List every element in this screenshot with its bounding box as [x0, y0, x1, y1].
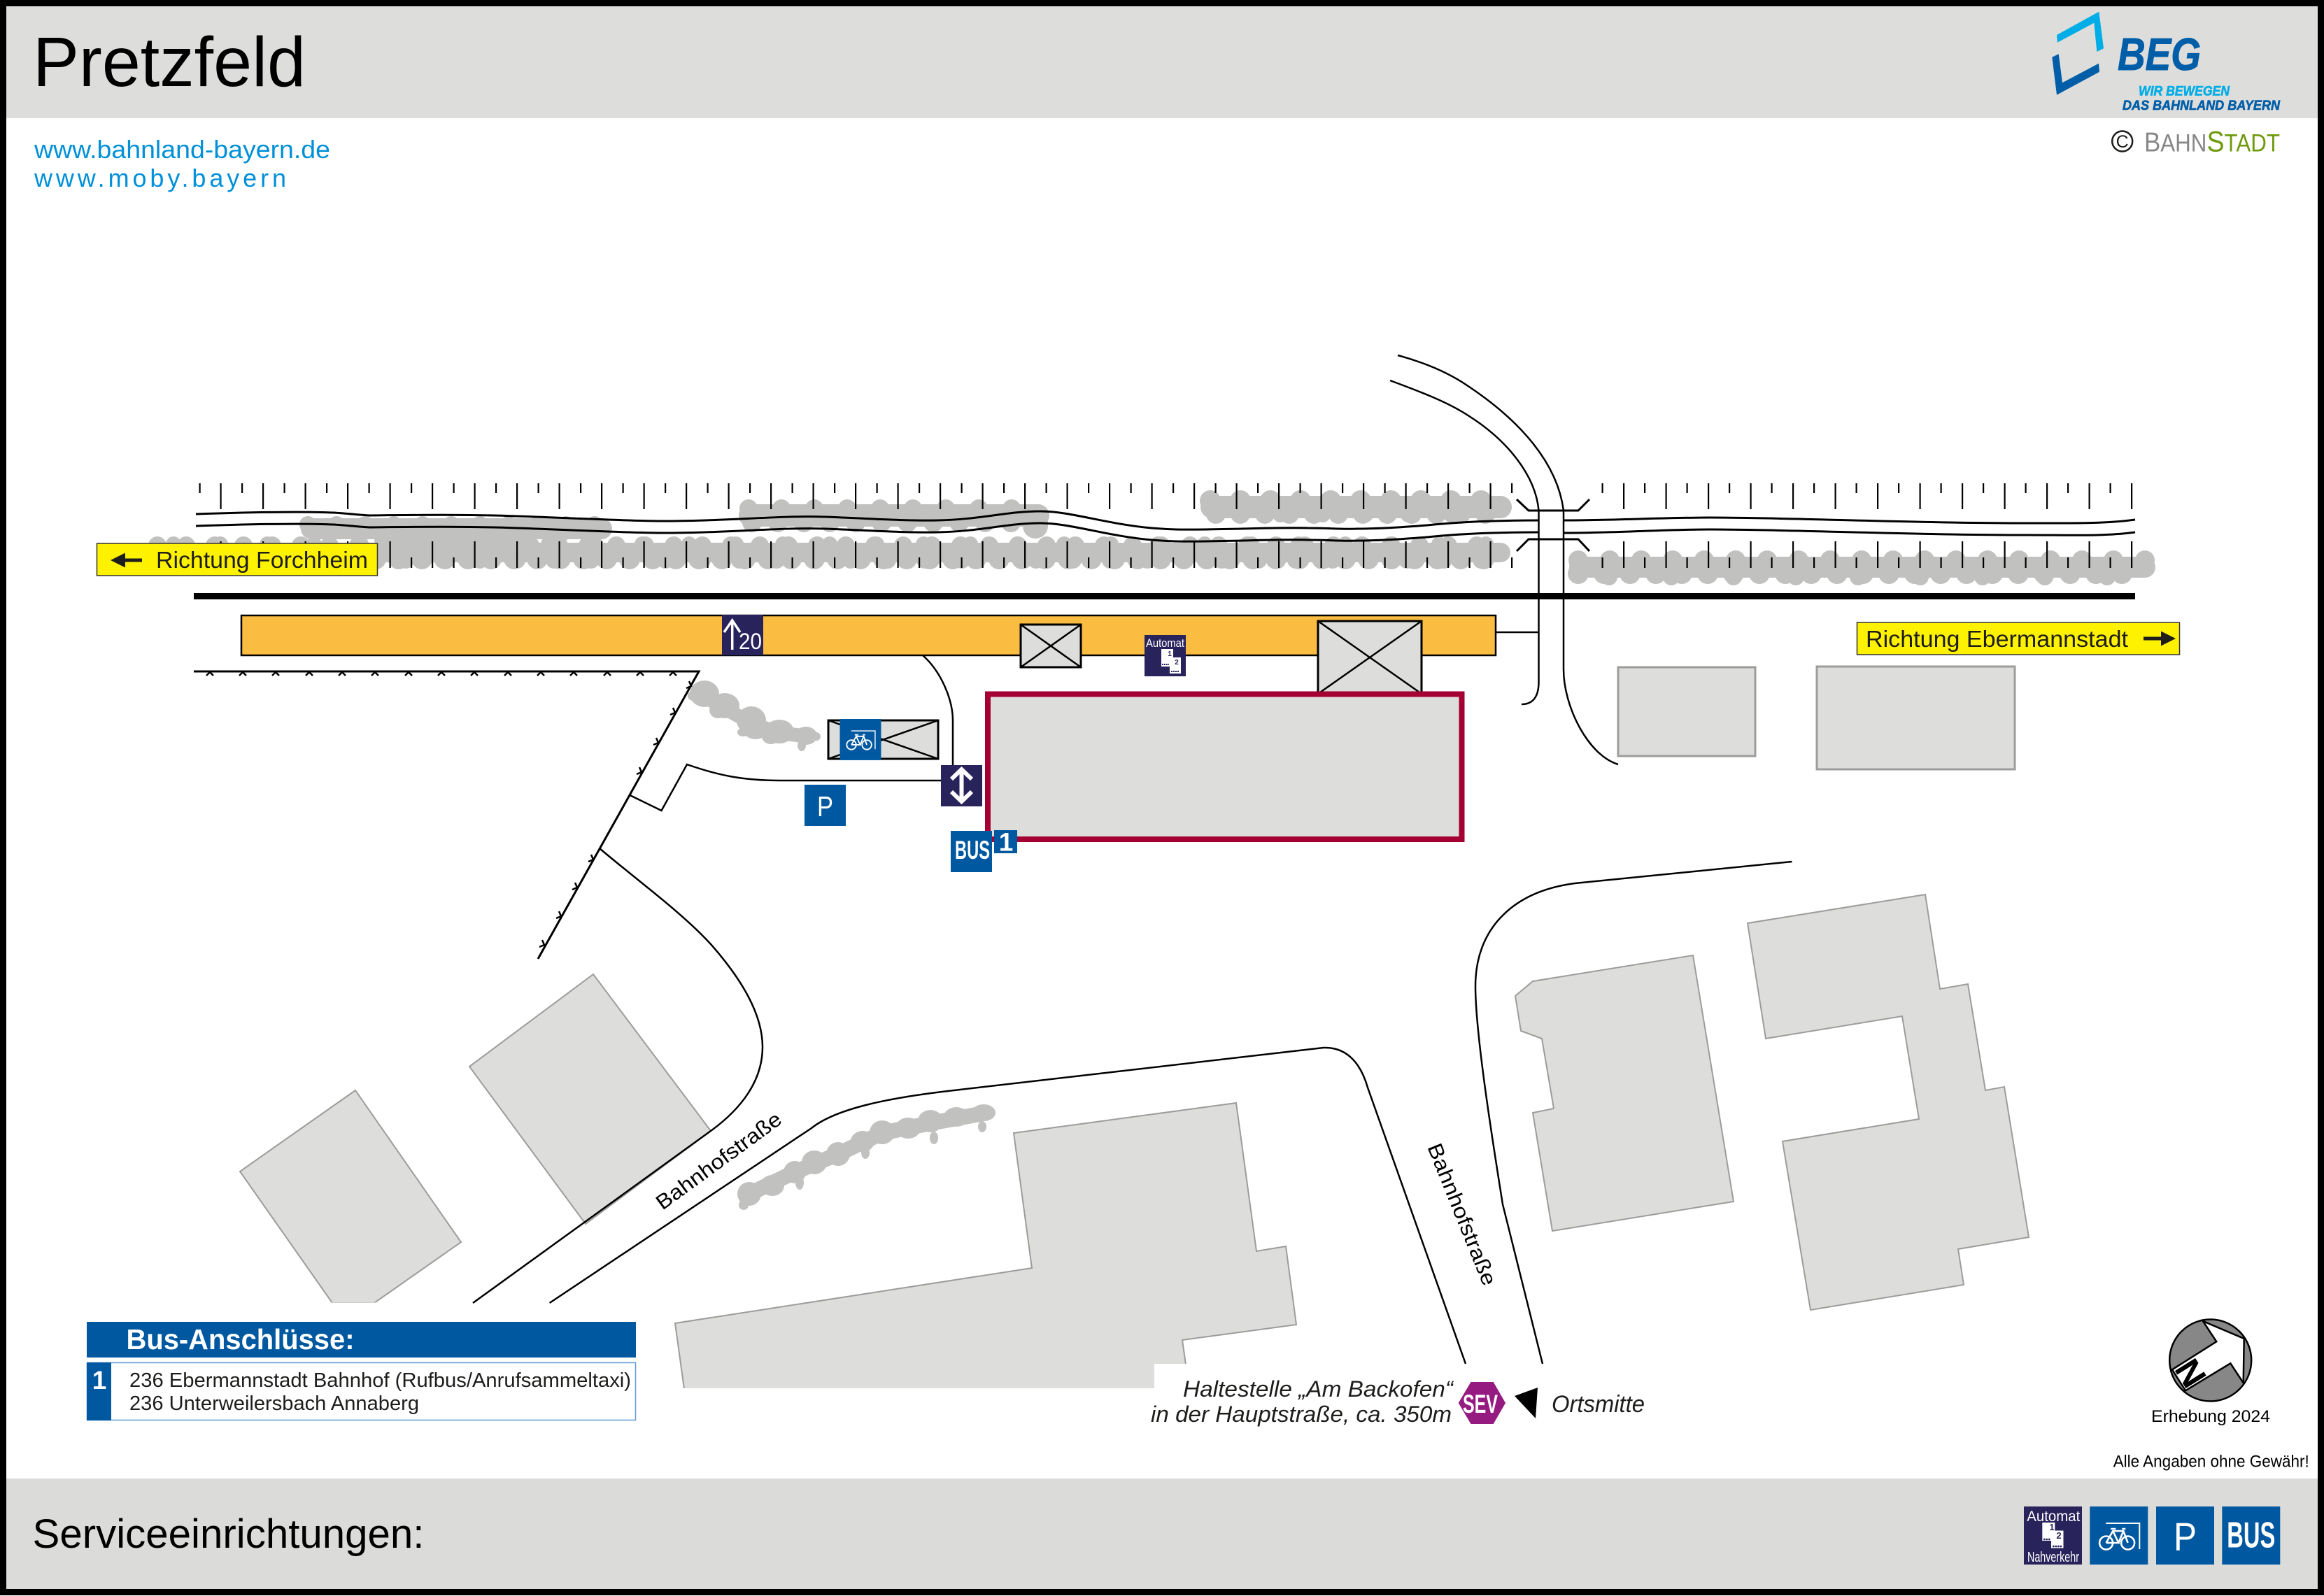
icon: stairs up and down — [941, 765, 982, 806]
bus table header — [87, 1322, 636, 1358]
icon: ticket machine — [2024, 1506, 2082, 1565]
hedge along Bahnhofstrasse — [737, 1104, 996, 1210]
icon: ticket machine on platform: 2 — [1175, 659, 1179, 667]
direction sign: Ebermannstadt — [1857, 622, 2180, 655]
icon: bicycle parking — [2090, 1506, 2148, 1565]
logo: BEG: WIR BEWEGEN — [2139, 84, 2230, 99]
building south-east D — [1748, 895, 2029, 1310]
icon: north arrow compass — [2167, 1319, 2251, 1402]
panel: header band — [6, 6, 2318, 118]
icon: ticket machine on platform: Automat — [1146, 636, 1184, 650]
thin river / creek lines crossing the map — [196, 511, 2135, 541]
label: Ortsmitte: Ortsmitte — [1552, 1391, 1645, 1418]
icon: bus stop number 1: 1 — [999, 828, 1013, 856]
hedge near bicycle shelter — [688, 681, 821, 751]
icon: ticket machine on platform — [1145, 635, 1186, 676]
panel: bus connections — [87, 1322, 636, 1420]
callout: replacement bus stop: Haltestelle „Am Backofen“ — [1183, 1376, 1454, 1402]
direction sign: Forchheim: Richtung Forchheim — [156, 547, 368, 573]
underpass box west — [1021, 625, 1081, 667]
underpass box east — [1318, 621, 1422, 694]
icon: ticket machine: 2 — [2056, 1530, 2062, 1541]
icon: SEV hexagon — [1459, 1382, 1505, 1424]
bus table rows — [87, 1362, 635, 1420]
sleepers / track tick marks — [199, 488, 2134, 562]
icon: stairs length 20 sign — [722, 615, 763, 655]
direction sign: Forchheim — [97, 543, 378, 576]
footpaths and fence lines — [194, 655, 1792, 1364]
links: www.bahnland-bayern.de — [34, 135, 330, 164]
links — [34, 135, 330, 192]
icon: bus sign on map: BUS — [955, 836, 990, 864]
icon: SEV hexagon: SEV — [1463, 1390, 1498, 1418]
icon: bus sign on map — [951, 831, 992, 872]
title: Pretzfeld — [33, 23, 306, 101]
hedges: vegetation along the tracks — [157, 501, 2148, 1194]
icon: ticket machine: 1 — [2049, 1522, 2055, 1532]
logo: copyright BahnStadt: BAHNSTADT — [2144, 124, 2280, 158]
station building — [988, 694, 1462, 839]
icon: north arrow compass: N — [2167, 1352, 2213, 1395]
icon: parking sign on map — [805, 785, 846, 826]
icon: ticket machine on platform: 1 — [1168, 650, 1172, 658]
logo: BEG: DAS BAHNLAND BAYERN — [2123, 99, 2281, 113]
building south-west 2 — [469, 974, 711, 1224]
white cover below southern buildings — [325, 1302, 1196, 1395]
bus table rows: 236 Unterweilersbach Annaberg — [129, 1392, 419, 1415]
grey neighbouring buildings — [240, 667, 2029, 1389]
logo: copyright BahnStadt: C — [2116, 132, 2129, 152]
direction sign: Ebermannstadt: Richtung Ebermannstadt — [1866, 626, 2128, 652]
icon: stairs length 20 sign: 20 — [739, 629, 762, 654]
icon: ticket machine: Nahverkehr — [2027, 1550, 2079, 1565]
text: survey year: Erhebung 2024 — [2151, 1407, 2270, 1426]
footer heading: Serviceeinrichtungen: — [32, 1511, 424, 1557]
panel: service footer band — [6, 1479, 2318, 1589]
street label Bahnhofstrasse west: Bahnhofstraße — [652, 1108, 786, 1215]
bridge and curved road over the track — [1390, 355, 1618, 764]
main track line — [194, 593, 2135, 599]
icon: parking: P — [2174, 1515, 2197, 1560]
building north-east large — [1817, 667, 2015, 769]
links: www.moby.bayern — [34, 164, 286, 192]
bus table header: Bus-Anschlüsse: — [126, 1323, 354, 1355]
building south centre — [675, 1103, 1296, 1389]
bus table rows: 1 — [92, 1366, 106, 1395]
building south-west 1 — [240, 1090, 461, 1303]
icon: bus: BUS — [2227, 1515, 2275, 1555]
bicycle shelter — [828, 720, 938, 759]
arrow: towards town centre — [1515, 1388, 1538, 1418]
icon: parking sign on map: P — [817, 790, 833, 822]
building south-east C — [1515, 955, 1734, 1231]
building north-east small — [1618, 667, 1755, 756]
platform — [241, 615, 1496, 655]
logo: BEG — [2052, 12, 2281, 113]
callout: replacement bus stop — [1151, 1376, 1454, 1427]
bus table rows: 236 Ebermannstadt Bahnhof (Rufbus/Anrufsammeltaxi) — [129, 1369, 631, 1392]
icon: bus stop number 1 — [994, 828, 1017, 856]
callout: replacement bus stop: in der Hauptstraße, ca. 350m — [1151, 1402, 1452, 1427]
street label Bahnhofstrasse east: Bahnhofstraße — [1423, 1140, 1501, 1289]
icon: bicycle parking map sign — [839, 719, 881, 760]
text: disclaimer: Alle Angaben ohne Gewähr! — [2113, 1452, 2309, 1472]
icon: bus — [2222, 1506, 2280, 1565]
icon: parking — [2156, 1506, 2214, 1565]
icon: ticket machine: Automat — [2027, 1509, 2080, 1525]
logo: BEG: BEG — [2118, 29, 2201, 80]
